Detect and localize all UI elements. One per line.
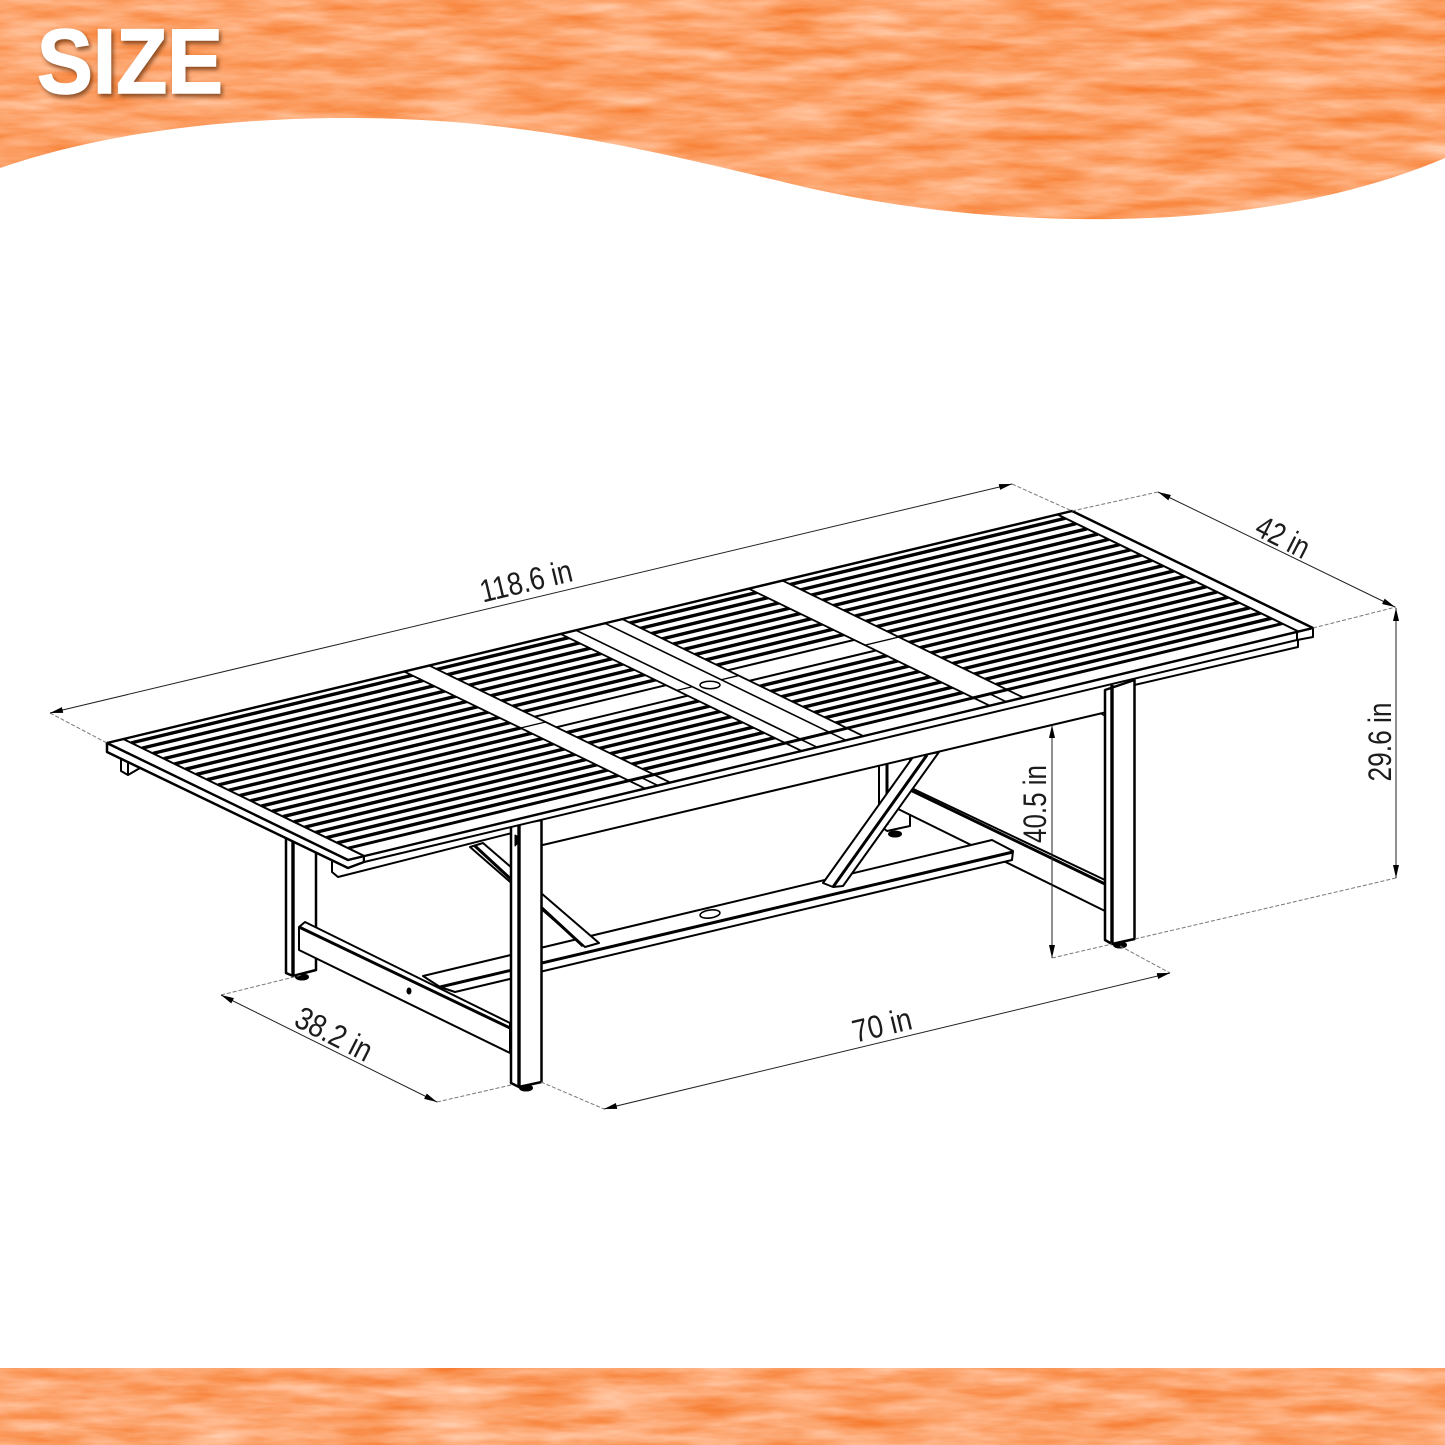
dimension: length 118.6 in	[50, 484, 1012, 713]
slat gaps end sections	[229, 566, 1185, 801]
cross board 1	[404, 666, 670, 789]
umbrella hole	[700, 681, 720, 689]
front rail line	[348, 624, 1282, 848]
front left leg	[511, 820, 542, 1090]
back left overhang block	[121, 755, 140, 775]
slatted table top	[107, 511, 1313, 860]
dimension: leg span 70 in	[604, 973, 1170, 1109]
front right leg	[1105, 680, 1134, 948]
right end board face	[1297, 628, 1313, 640]
left end board face	[107, 743, 364, 868]
long lower stretcher	[423, 840, 1013, 992]
dimension: leg depth 38.2 in: 38.2 in	[289, 999, 379, 1069]
stretcher hole	[700, 909, 720, 919]
cross board 3	[749, 581, 1024, 706]
end-of-board ticks	[641, 694, 1006, 786]
mid joints	[521, 637, 899, 728]
centre section plank lines	[512, 632, 908, 733]
title: SIZE	[37, 11, 223, 113]
dimension: leg depth 38.2 in	[221, 995, 437, 1102]
table line drawing	[107, 511, 1313, 1090]
dimension: clearance 40.5 in: 40.5 in	[1017, 765, 1053, 843]
dimension: leg span 70 in: 70 in	[849, 1000, 915, 1050]
slat gaps full length	[131, 518, 1271, 843]
back right leg	[879, 750, 910, 836]
right X brace	[823, 752, 939, 887]
top outline	[107, 511, 1313, 860]
left overhang block under top	[332, 822, 512, 877]
left end board	[107, 739, 364, 860]
extension lines	[50, 484, 1396, 1109]
left X brace	[470, 843, 599, 947]
top wood texture banner	[0, 0, 1445, 230]
bottom wood texture band	[0, 1368, 1445, 1445]
dimension: length 118.6 in: 118.6 in	[476, 553, 576, 609]
left end rail	[299, 922, 510, 1053]
dimension: width 42 in	[1158, 492, 1395, 607]
right end board	[1058, 511, 1313, 631]
dimensions	[50, 484, 1398, 1109]
central apron	[530, 680, 1115, 848]
dimension: width 42 in: 42 in	[1250, 508, 1316, 566]
cross board centre	[561, 619, 863, 751]
right end rail	[890, 785, 1105, 911]
dimension: height 29.6 in: 29.6 in	[1362, 702, 1398, 782]
rail bolt hole	[406, 988, 412, 994]
right overhang block	[1130, 636, 1298, 686]
back left leg	[286, 830, 316, 980]
front edge face	[364, 632, 1297, 862]
